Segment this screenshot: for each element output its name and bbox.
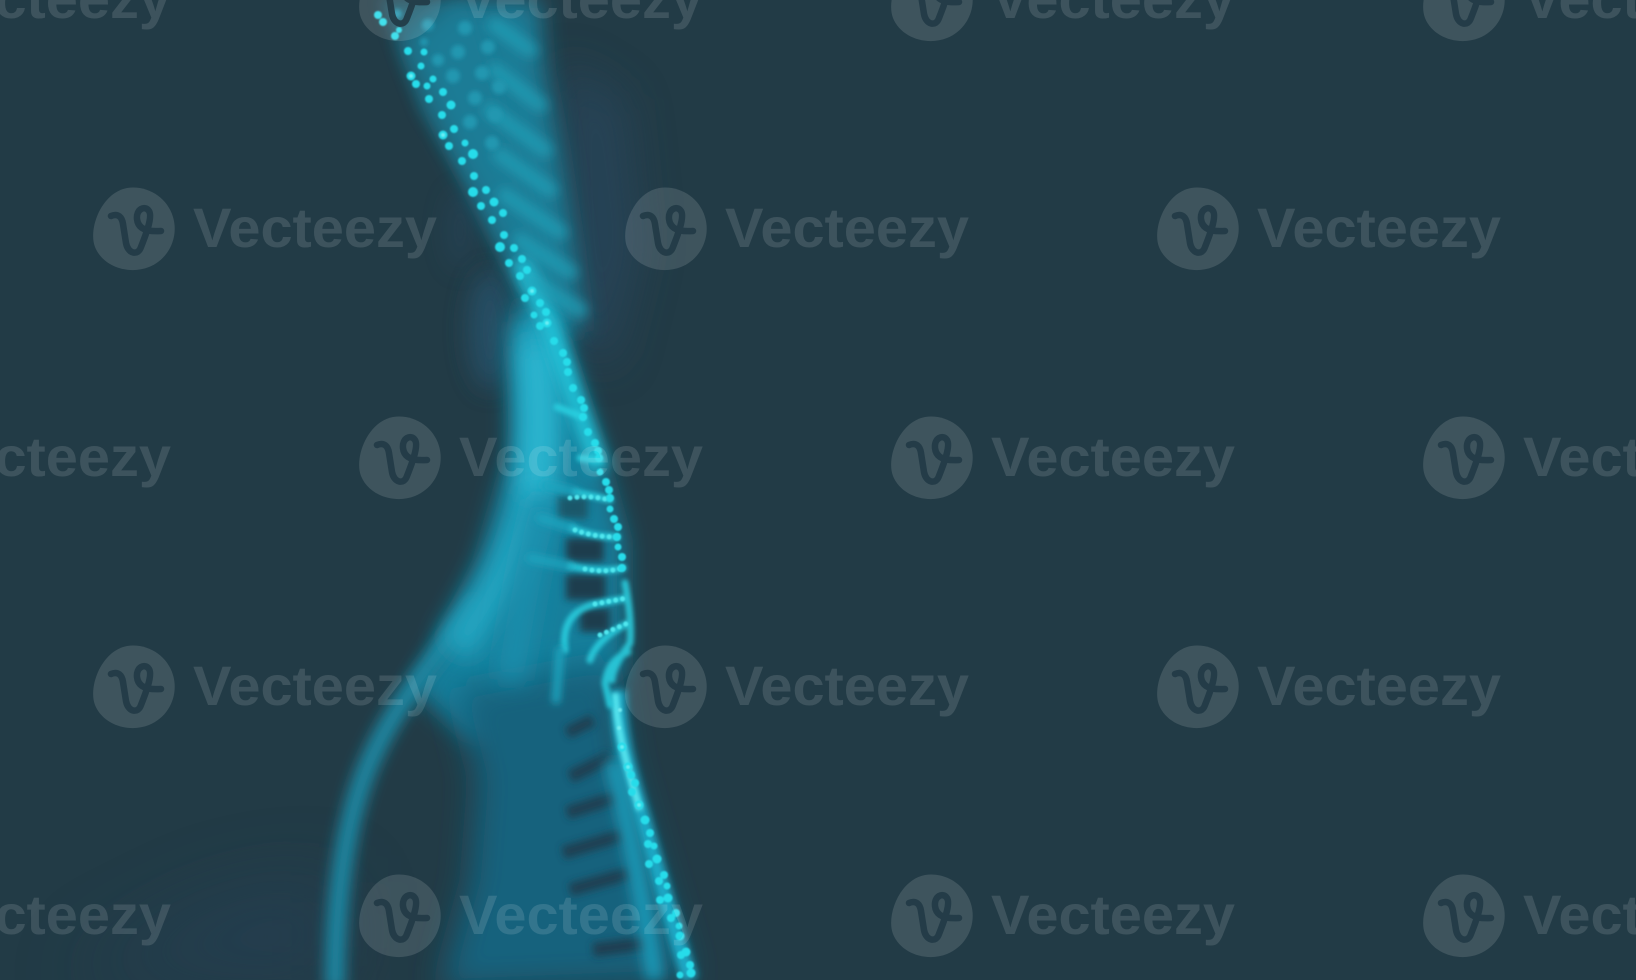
watermark (359, 417, 703, 499)
watermark row 1 (0, 0, 1636, 41)
watermark: Vecteezy (193, 196, 437, 259)
wave: bright core (455, 260, 600, 680)
background haze (60, 60, 640, 980)
watermark (625, 646, 969, 728)
watermark (1423, 0, 1636, 41)
wave: soft body (380, 0, 690, 980)
wave: blurred upper dots (392, 9, 506, 150)
watermark (891, 875, 1235, 957)
watermark (1157, 646, 1501, 728)
watermark (1157, 188, 1501, 270)
watermark (93, 188, 437, 270)
watermark: Vecteezy (1257, 196, 1501, 259)
watermark row 4 (93, 646, 1501, 728)
watermark row 3 (0, 417, 1636, 499)
watermark: Vecteezy (991, 883, 1235, 946)
watermark (625, 188, 969, 270)
wave: sharp particle dots (374, 11, 696, 978)
watermark (1423, 417, 1636, 499)
wave: left strand (335, 600, 480, 980)
watermark (891, 417, 1235, 499)
watermark: Vecteezy (1257, 654, 1501, 717)
watermark (359, 875, 703, 957)
watermark (1423, 875, 1636, 957)
watermark: Vecteezy (725, 654, 969, 717)
watermark: Vecteezy (991, 425, 1235, 488)
watermark (359, 0, 703, 41)
watermark: Vecteezy (193, 654, 437, 717)
watermark: Vecteezy (459, 425, 703, 488)
wave: blurred upper stripes (490, 25, 580, 310)
watermark (891, 0, 1235, 41)
wave: lit ribs (530, 407, 630, 705)
wave: glowing cluster highlights (409, 74, 641, 807)
watermark (93, 646, 437, 728)
wave: lower beam glow (612, 690, 690, 980)
wave: dark gaps between ribs (558, 495, 647, 950)
watermark row 5 (0, 875, 1636, 957)
watermark: Vecteezy (725, 196, 969, 259)
watermark row 2 (93, 188, 1501, 270)
watermark: Vecteezy (459, 883, 703, 946)
